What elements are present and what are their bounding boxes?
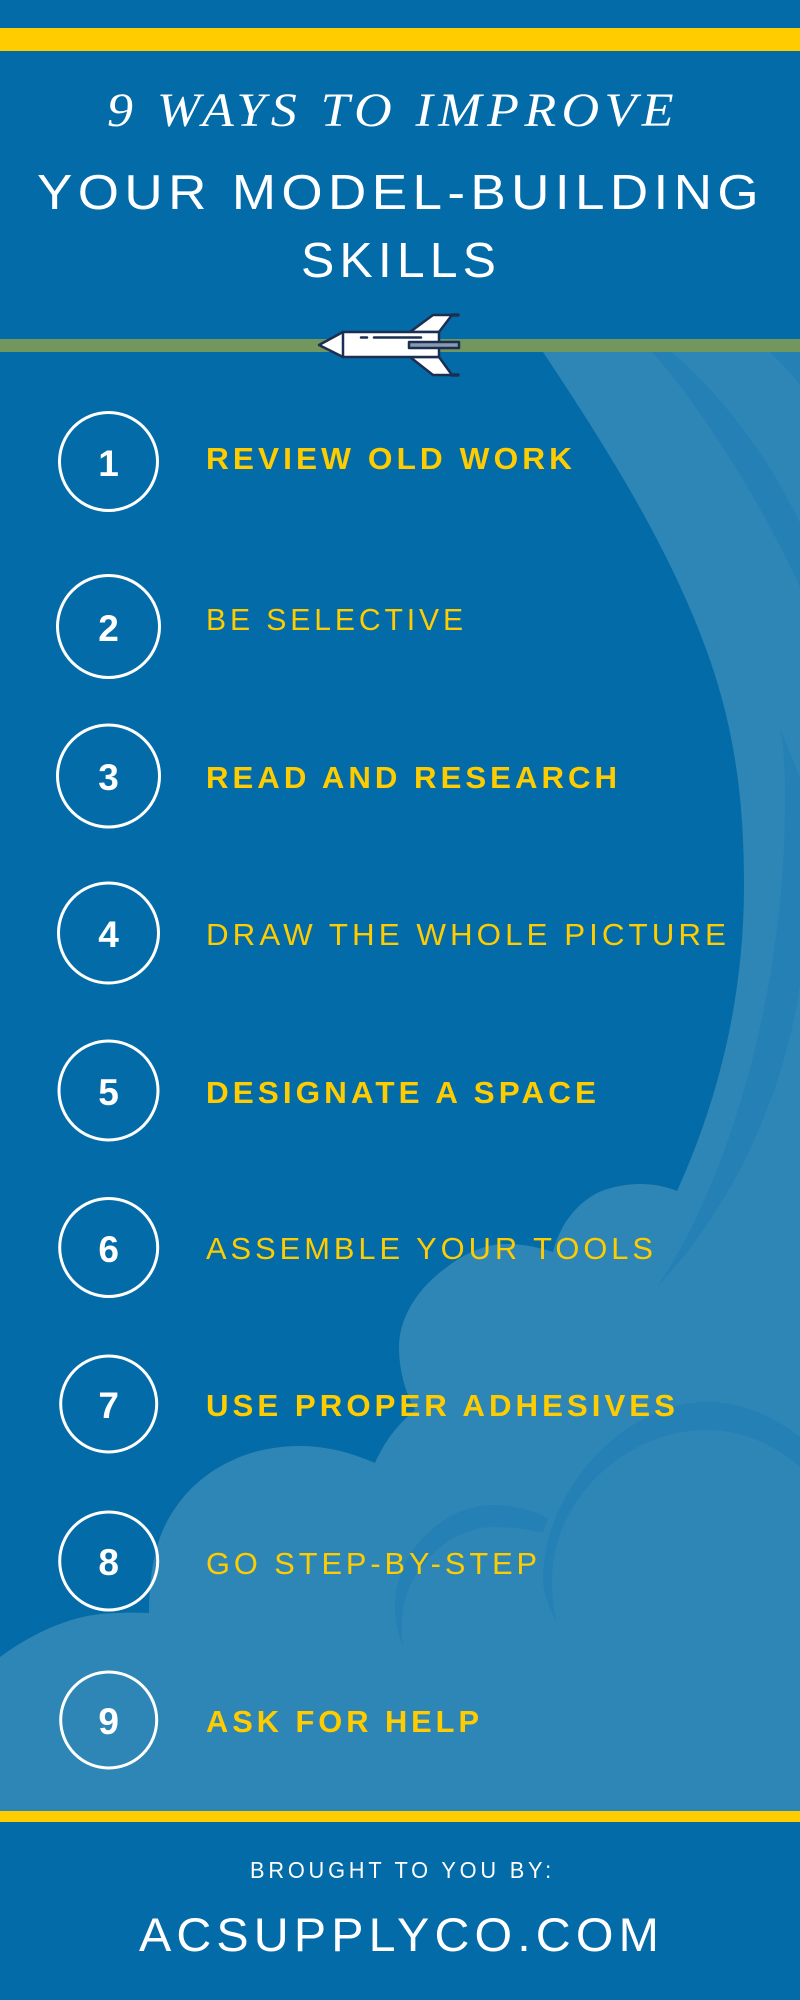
step 3 badge: 3 (98, 757, 119, 798)
step 1 label: REVIEW OLD WORK (206, 441, 576, 476)
title line: skills: SKILLS (301, 234, 501, 288)
step 6 label: ASSEMBLE YOUR TOOLS (206, 1231, 657, 1266)
step 1 badge (60, 412, 158, 510)
step 4 badge: 4 (98, 914, 119, 955)
step 7 badge (61, 1356, 157, 1452)
step 2 badge: 2 (98, 608, 119, 649)
step 2 badge (58, 576, 160, 678)
green divider bar (0, 339, 800, 352)
title (37, 84, 764, 288)
title line: 9 ways to improve: 9 WAYS TO IMPROVE (107, 84, 679, 137)
step 6 (60, 1198, 657, 1296)
footer text: brought to you by: BROUGHT TO YOU BY: (250, 1857, 555, 1883)
step 5 badge (59, 1041, 158, 1140)
step 4 (58, 883, 730, 983)
step 5 badge: 5 (98, 1072, 119, 1113)
top yellow bar (0, 28, 800, 51)
title line: your model-building: YOUR MODEL-BUILDING (37, 166, 764, 220)
step 4 badge (58, 883, 158, 983)
step 8 badge: 8 (98, 1542, 119, 1583)
footer panel (0, 1811, 800, 2000)
step 8 (60, 1512, 541, 1610)
step 1 badge: 1 (98, 443, 119, 484)
step 3 (58, 725, 621, 827)
step 9 badge: 9 (98, 1701, 119, 1742)
step 6 badge: 6 (98, 1229, 119, 1270)
icon: rocket (319, 315, 459, 375)
step 7 label: USE PROPER ADHESIVES (206, 1388, 679, 1423)
step 8 label: GO STEP-BY-STEP (206, 1546, 541, 1581)
step 8 badge (60, 1512, 158, 1610)
bottom yellow bar (0, 1811, 800, 1822)
step 1 (60, 412, 576, 510)
step 3 label: READ AND RESEARCH (206, 760, 621, 795)
footer text: website: ACSUPPLYCO.COM (139, 1908, 664, 1961)
step 7 (61, 1356, 679, 1452)
step 4 label: DRAW THE WHOLE PICTURE (206, 917, 730, 952)
step 9 badge (61, 1672, 157, 1768)
step 7 badge: 7 (98, 1385, 119, 1426)
step 5 label: DESIGNATE A SPACE (206, 1075, 600, 1110)
background: sky swirl and clouds (0, 352, 800, 1811)
step 9 label: ASK FOR HELP (206, 1704, 483, 1739)
step 9 (61, 1672, 483, 1768)
step 3 badge (58, 725, 160, 827)
step 2 label: BE SELECTIVE (206, 602, 467, 637)
step 5 (59, 1041, 600, 1140)
step 6 badge (60, 1198, 158, 1296)
step 2 (58, 576, 467, 678)
